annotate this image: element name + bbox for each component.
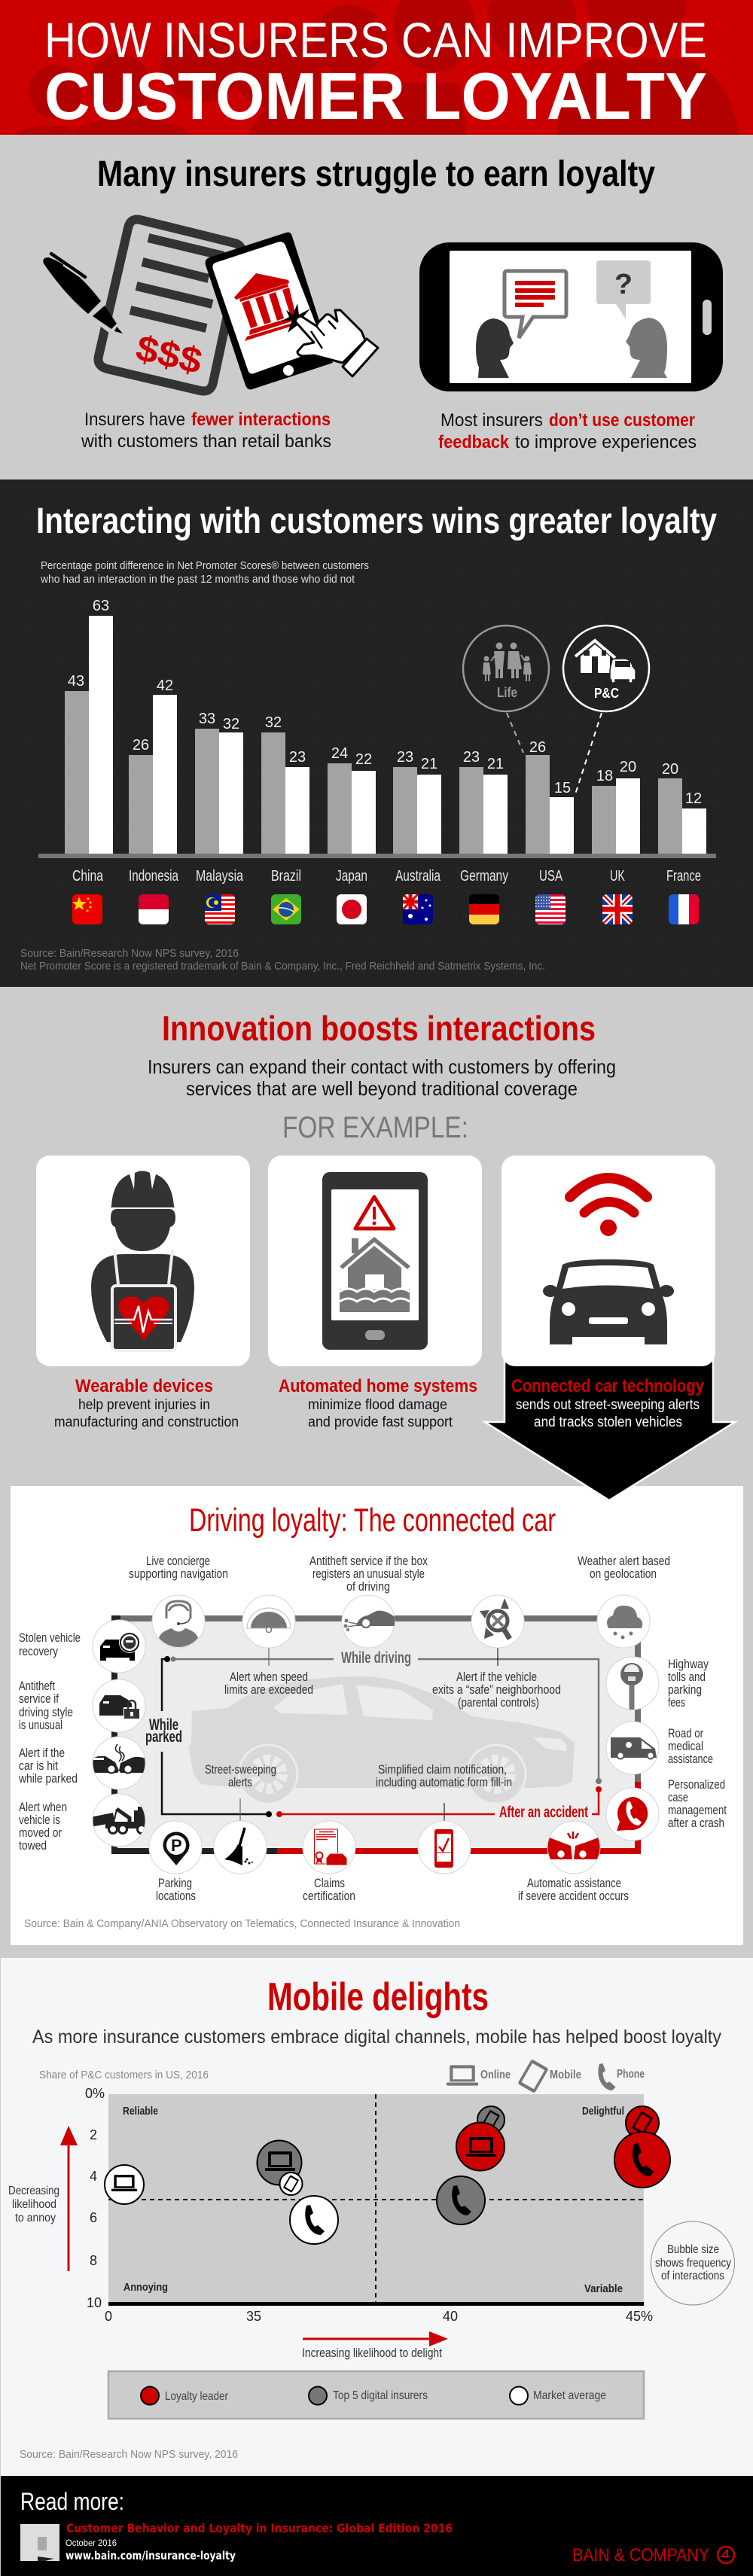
legend box: Top 5 digital insurers bbox=[333, 2389, 428, 2402]
bar chart: Malaysia bbox=[196, 868, 244, 885]
bubble chart: 0 bbox=[105, 2309, 112, 2324]
icon: document, pen and phone with bank bbox=[43, 219, 378, 391]
captions: top row bbox=[129, 1554, 670, 1594]
bar chart: 21 bbox=[487, 756, 504, 772]
report link: www.bain.com/insurance-loyalty bbox=[66, 2549, 236, 2562]
captions: left column: car is hit bbox=[19, 1759, 58, 1773]
captions: left column: towed bbox=[19, 1839, 47, 1853]
captions: left column: recovery bbox=[19, 1645, 59, 1658]
source notes bbox=[20, 947, 545, 973]
icon: wifi bbox=[570, 1178, 647, 1232]
legend box: Market average bbox=[533, 2389, 606, 2402]
channel legend: Online bbox=[480, 2069, 511, 2081]
bubble size note: shows frequency bbox=[655, 2257, 731, 2270]
icon: certificate bbox=[315, 1829, 347, 1865]
captions: bottom row bbox=[156, 1877, 629, 1903]
captions: left column: Antitheft bbox=[19, 1679, 55, 1693]
connected car caption: and tracks stolen vehicles bbox=[534, 1414, 682, 1430]
icon: Life circle bbox=[463, 626, 549, 711]
captions: top row: registers an unusual style bbox=[312, 1567, 425, 1581]
source: mobile: Source: Bain/Research Now NPS survey, 2016 bbox=[20, 2448, 238, 2461]
captions: right column: case bbox=[668, 1791, 688, 1804]
icon: hit car bbox=[90, 1744, 148, 1774]
y axis label: Decreasing bbox=[8, 2185, 59, 2197]
captions: right column: assistance bbox=[668, 1752, 713, 1766]
heading: innovation: Innovation boosts interactions bbox=[162, 1009, 596, 1048]
bar chart: 15 bbox=[554, 780, 571, 796]
title line 2: CUSTOMER LOYALTY bbox=[44, 59, 707, 133]
captions: left column: Alert if the bbox=[19, 1746, 65, 1760]
icon: tow truck bbox=[90, 1807, 148, 1834]
bubble chart: Delightful bbox=[582, 2105, 624, 2118]
dashed connector lines bbox=[507, 713, 602, 796]
bubble: market average phone bbox=[290, 2196, 338, 2244]
captions: bottom row: Parking bbox=[158, 1877, 192, 1890]
captions: center: Alert when speed bbox=[230, 1670, 308, 1684]
icon: phone with flood alert bbox=[322, 1172, 428, 1350]
chart subtitle bbox=[40, 559, 369, 586]
bar chart: 12 bbox=[685, 790, 702, 807]
bar chart: 23 bbox=[397, 749, 413, 766]
icon: phone speech bubble bbox=[617, 1797, 648, 1831]
chart label: Share of P&C customers in US, 2016 bbox=[39, 2069, 209, 2081]
heading: driving loyalty: Driving loyalty: The connected car bbox=[189, 1502, 556, 1539]
panel: connected car bbox=[11, 1486, 743, 1945]
bubble chart: 40 bbox=[443, 2309, 458, 2324]
bubble: top 5 phone bbox=[437, 2176, 485, 2224]
captions: right column bbox=[668, 1658, 727, 1830]
subheading: As more insurance customers embrace digital channels, mobile has helped boost loyalty bbox=[32, 2026, 721, 2048]
captions: right column: management bbox=[668, 1804, 727, 1817]
captions: right column: Personalized bbox=[668, 1778, 725, 1792]
x axis label: Increasing likelihood to delight bbox=[302, 2346, 442, 2360]
icon: broom bbox=[224, 1828, 253, 1865]
bubble size note bbox=[651, 2221, 735, 2305]
source notes: Net Promoter Score is a registered trademark of Bain & Company, Inc., Fred Reichheld and Satmetrix Systems, Inc. bbox=[20, 960, 545, 973]
captions: left column: Stolen vehicle bbox=[19, 1631, 81, 1645]
icon: worker with heart monitor bbox=[91, 1171, 194, 1350]
connected car caption: Connected car technology bbox=[511, 1376, 705, 1396]
bar chart: 23 bbox=[289, 749, 306, 766]
bar chart: 20 bbox=[662, 761, 678, 778]
home systems caption bbox=[279, 1376, 477, 1430]
report link: Customer Behavior and Loyalty in Insurance: Global Edition 2016 bbox=[66, 2521, 453, 2535]
bubble: leader online bbox=[456, 2123, 505, 2171]
source: connected car: Source: Bain & Company/ANIA Observatory on Telematics, Connected Insurance & Innovation bbox=[24, 1917, 460, 1930]
captions: center: exits a “safe” neighborhood bbox=[432, 1683, 561, 1697]
icon: landscape phone with conversation bbox=[419, 242, 723, 391]
captions: center: alerts bbox=[228, 1776, 252, 1789]
bubble chart bbox=[85, 2086, 670, 2324]
icon: car with lock bbox=[99, 1695, 140, 1720]
diagram field and border bbox=[111, 1616, 640, 1853]
chart subtitle: who had an interaction in the past 12 months and those who did not bbox=[40, 573, 355, 586]
bar chart: USA bbox=[539, 868, 562, 885]
captions: bottom row: Claims bbox=[314, 1877, 345, 1890]
captions: top row: on geolocation bbox=[590, 1567, 657, 1581]
captions: bottom row: if severe accident occurs bbox=[518, 1889, 629, 1903]
captions: left column: service if bbox=[19, 1692, 59, 1706]
home systems caption: and provide fast support bbox=[308, 1414, 453, 1430]
icon: parking pin bbox=[163, 1832, 190, 1865]
panel: innovation boosts interactions bbox=[36, 1009, 715, 1430]
caption: customer feedback: Most insurers bbox=[441, 410, 543, 431]
caption: fewer interactions: with customers than retail banks bbox=[81, 431, 331, 452]
bubble size note: Bubble size bbox=[667, 2243, 719, 2256]
while driving line and label bbox=[170, 1649, 602, 1784]
captions: left column bbox=[18, 1631, 81, 1853]
bubble chart: 45% bbox=[626, 2309, 653, 2324]
intro text: Insurers can expand their contact with customers by offering bbox=[148, 1055, 616, 1078]
bar chart: Brazil bbox=[271, 868, 301, 885]
report link: October 2016 bbox=[66, 2538, 117, 2548]
captions: right column: medical bbox=[668, 1740, 703, 1753]
captions: top row: Live concierge bbox=[146, 1554, 210, 1568]
caption: fewer interactions: Insurers have bbox=[84, 410, 185, 430]
bubble chart: 6 bbox=[90, 2210, 97, 2225]
bubble: market average mobile bbox=[280, 2173, 303, 2195]
footer bbox=[1, 2476, 753, 2576]
caption: fewer interactions bbox=[81, 410, 331, 452]
wearable caption: help prevent injuries in bbox=[78, 1397, 210, 1413]
wearable caption bbox=[54, 1376, 239, 1430]
bar chart: 26 bbox=[529, 739, 546, 756]
report thumbnail bbox=[20, 2524, 59, 2561]
x axis arrow bbox=[303, 2331, 448, 2346]
captions: right column: parking bbox=[668, 1683, 702, 1697]
bubble chart: 0% bbox=[85, 2086, 105, 2101]
bubble chart: 35 bbox=[246, 2309, 261, 2324]
icon: rain cloud bbox=[607, 1606, 642, 1640]
bar chart: 33 bbox=[199, 711, 215, 727]
bar chart: 32 bbox=[265, 714, 282, 731]
captions: center: Simplified claim notification, bbox=[378, 1763, 507, 1777]
bubble chart: Annoying bbox=[123, 2281, 168, 2294]
bubble: top 5 mobile bbox=[477, 2106, 505, 2133]
chart subtitle: Percentage point difference in Net Promoter Scores® between customers bbox=[41, 559, 369, 572]
captions: right column: fees bbox=[668, 1696, 685, 1710]
bar chart: Germany bbox=[460, 868, 508, 885]
bar chart: Australia bbox=[395, 868, 441, 885]
captions: center: (parental controls) bbox=[458, 1696, 539, 1710]
y axis arrow bbox=[60, 2126, 78, 2271]
report link bbox=[66, 2521, 453, 2562]
bubble chart: 8 bbox=[90, 2253, 97, 2268]
icon: car with exhaust bbox=[343, 1611, 395, 1631]
card: wearable bbox=[36, 1156, 250, 1366]
bar chart: 63 bbox=[93, 598, 109, 614]
arrow: to connected car bbox=[485, 1355, 735, 1500]
bar chart: 26 bbox=[133, 737, 149, 754]
captions: center: including automatic form fill-in bbox=[376, 1776, 512, 1789]
bar chart: Japan bbox=[336, 868, 367, 885]
bar chart: 43 bbox=[68, 673, 84, 690]
bubble chart: Reliable bbox=[123, 2105, 158, 2118]
caption: customer feedback: feedback bbox=[438, 432, 510, 452]
car silhouette bbox=[188, 1676, 575, 1804]
bar chart: 23 bbox=[463, 749, 480, 766]
bar chart: China bbox=[72, 868, 104, 885]
read more: Read more: bbox=[20, 2488, 124, 2515]
card: home systems bbox=[268, 1156, 482, 1366]
captions: center bbox=[205, 1670, 561, 1789]
bubble chart: Variable bbox=[584, 2282, 623, 2295]
bubble chart: 2 bbox=[90, 2127, 97, 2142]
bar chart: 20 bbox=[620, 759, 636, 775]
panel: interacting with customers bbox=[0, 480, 753, 987]
wearable caption: Wearable devices bbox=[75, 1376, 213, 1396]
for example: FOR EXAMPLE: bbox=[282, 1111, 468, 1144]
captions: center: Alert if the vehicle bbox=[456, 1670, 537, 1684]
while parked line and label: While bbox=[149, 1716, 178, 1734]
bar chart: UK bbox=[610, 868, 625, 885]
icon: crash bbox=[547, 1832, 600, 1859]
bar chart: 18 bbox=[596, 768, 613, 784]
bubble size note: of interactions bbox=[661, 2270, 724, 2282]
captions: top row: of driving bbox=[346, 1580, 390, 1594]
card: connected car bbox=[501, 1156, 715, 1366]
captions: right column: after a crash bbox=[668, 1816, 724, 1830]
flags bbox=[72, 894, 699, 924]
after an accident line and label: After an accident bbox=[499, 1804, 588, 1821]
channel legend: Mobile bbox=[550, 2069, 581, 2081]
y axis label: likelihood bbox=[12, 2198, 56, 2211]
captions: bottom row: locations bbox=[156, 1889, 196, 1903]
icon: speedometer bbox=[247, 1608, 291, 1632]
channel legend bbox=[447, 2059, 645, 2093]
captions: left column: vehicle is bbox=[19, 1813, 60, 1827]
captions: center: Street-sweeping bbox=[205, 1763, 276, 1777]
captions: right column: Highway bbox=[668, 1658, 709, 1671]
icon: landscape phone with conversation: ? bbox=[614, 269, 633, 300]
icon: parking pin: P bbox=[171, 1836, 182, 1855]
captions: left column: is unusual bbox=[19, 1719, 62, 1732]
legend box bbox=[108, 2371, 644, 2419]
icon: Life circle: Life bbox=[497, 685, 517, 700]
captions: top row: Weather alert based bbox=[578, 1554, 670, 1568]
header banner bbox=[0, 0, 753, 135]
while parked line and label: parked bbox=[145, 1728, 182, 1746]
logo: Bain & Company: BAIN & COMPANY bbox=[572, 2545, 709, 2565]
while parked line and label bbox=[145, 1656, 272, 1817]
bubble: market average online bbox=[105, 2165, 144, 2204]
y axis label bbox=[8, 2185, 59, 2224]
intro text: services that are well beyond traditional coverage bbox=[186, 1077, 578, 1100]
channel legend: Phone bbox=[617, 2068, 645, 2081]
captions: left column: Alert when bbox=[19, 1801, 67, 1814]
connected car caption: sends out street-sweeping alerts bbox=[516, 1397, 700, 1413]
after an accident line and label bbox=[276, 1786, 602, 1821]
caption: customer feedback bbox=[438, 410, 697, 452]
icon: parking meter bbox=[620, 1663, 643, 1710]
captions: left column: while parked bbox=[18, 1772, 78, 1786]
connected car caption bbox=[511, 1376, 705, 1430]
bubble chart: 10 bbox=[87, 2295, 102, 2310]
captions: bottom row: certification bbox=[303, 1889, 355, 1903]
captions: left column: moved or bbox=[19, 1826, 62, 1840]
wearable caption: manufacturing and construction bbox=[54, 1414, 239, 1430]
bubble: leader phone bbox=[614, 2132, 670, 2188]
while driving line and label: While driving bbox=[341, 1649, 411, 1667]
caption: customer feedback: to improve experiences bbox=[515, 432, 697, 452]
icon: P&C circle bbox=[563, 626, 649, 711]
captions: bottom row: Automatic assistance bbox=[527, 1877, 621, 1890]
bar chart: Indonesia bbox=[129, 868, 179, 885]
bar chart: 32 bbox=[223, 716, 239, 732]
home systems caption: minimize flood damage bbox=[308, 1397, 447, 1413]
captions: top row: supporting navigation bbox=[129, 1567, 228, 1581]
home systems caption: Automated home systems bbox=[279, 1376, 477, 1396]
caption: fewer interactions: fewer interactions bbox=[191, 410, 331, 430]
bar chart: 42 bbox=[157, 677, 173, 694]
captions: left column: driving style bbox=[19, 1706, 73, 1719]
bubble: leader mobile bbox=[626, 2106, 659, 2139]
caption: customer feedback: don’t use customer bbox=[549, 410, 695, 431]
icon: concierge bbox=[158, 1601, 199, 1649]
source notes: Source: Bain/Research Now NPS survey, 2016 bbox=[20, 947, 239, 960]
bar chart: 21 bbox=[421, 756, 437, 772]
bar chart: 24 bbox=[331, 745, 348, 762]
y axis label: to annoy bbox=[15, 2212, 56, 2224]
bar chart: France bbox=[666, 868, 701, 885]
captions: right column: Road or bbox=[668, 1727, 703, 1740]
bubble chart: 4 bbox=[90, 2169, 97, 2184]
captions: right column: tolls and bbox=[668, 1670, 706, 1684]
intro text bbox=[148, 1055, 616, 1100]
bar chart bbox=[38, 598, 716, 885]
icon: P&C circle: P&C bbox=[594, 686, 619, 701]
panel: mobile delights bbox=[1, 1958, 753, 2476]
heading: many insurers: Many insurers struggle to earn loyalty bbox=[97, 154, 655, 194]
captions: center: limits are exceeded bbox=[224, 1683, 313, 1697]
icon: car front bbox=[543, 1259, 674, 1344]
icon: magnifier with compass arrows bbox=[480, 1598, 510, 1639]
legend box: Loyalty leader bbox=[165, 2390, 229, 2403]
icon circles bbox=[93, 1595, 659, 1874]
bubble: top 5 online bbox=[258, 2141, 301, 2185]
icon: ambulance bbox=[611, 1737, 657, 1758]
connector ticks bbox=[240, 1648, 498, 1821]
bar chart: 22 bbox=[355, 751, 372, 768]
icon: phone with check bbox=[434, 1829, 453, 1868]
icon: document, pen and phone with bank: $$$ bbox=[133, 328, 206, 382]
captions: top row: Antitheft service if the box bbox=[309, 1554, 428, 1568]
icon: thief car bbox=[100, 1632, 140, 1661]
heading: mobile delights: Mobile delights bbox=[267, 1975, 489, 2019]
